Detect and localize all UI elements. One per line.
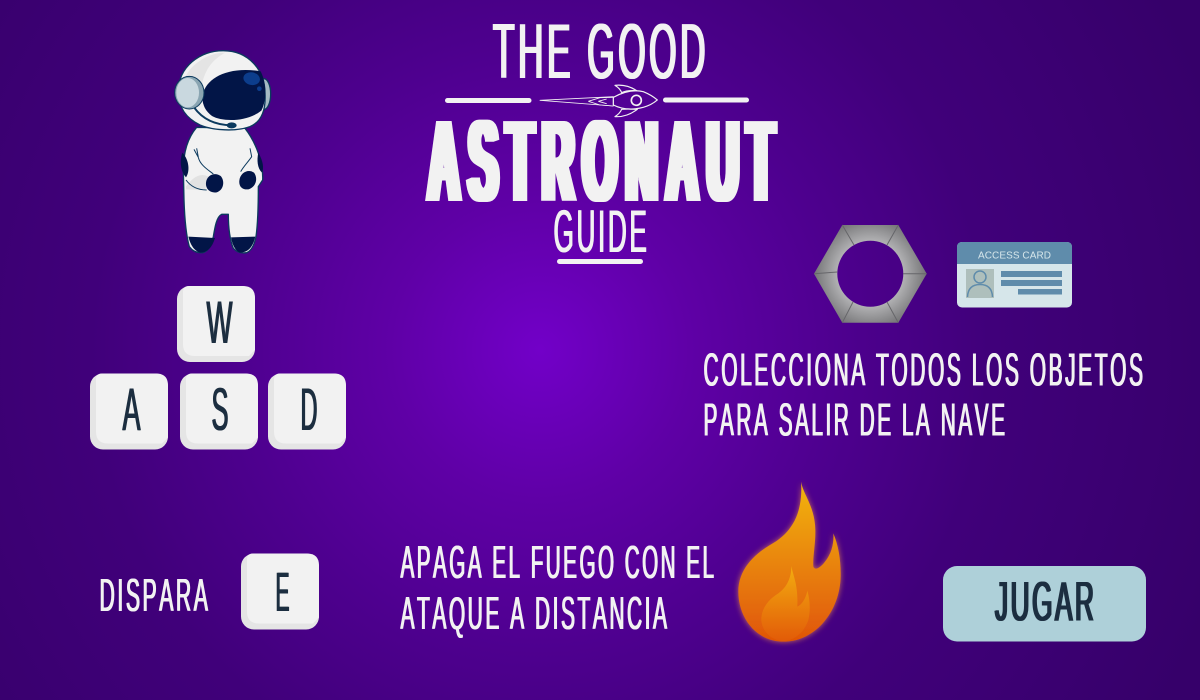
shoot instruction <box>99 554 319 630</box>
body shading <box>186 175 208 190</box>
icon: flame <box>738 482 841 642</box>
key E <box>241 554 319 630</box>
right arm line <box>241 148 252 172</box>
card label: ACCESS CARD <box>978 250 1051 262</box>
key W: W <box>206 289 232 356</box>
microphone <box>227 122 237 128</box>
title: THE GOOD <box>493 7 709 95</box>
left arm line <box>186 148 213 190</box>
key A <box>90 374 168 450</box>
astronaut back ear <box>257 79 271 109</box>
visor <box>202 70 265 120</box>
headset ear <box>175 76 204 109</box>
left title bar <box>445 98 532 103</box>
left arm patch <box>181 153 188 177</box>
key A: A <box>122 376 140 443</box>
card photo <box>966 269 994 298</box>
play button <box>943 566 1146 642</box>
visor highlight <box>242 71 261 86</box>
key S <box>180 374 258 450</box>
fire instructions <box>400 536 716 639</box>
key S: S <box>211 376 228 443</box>
left boot <box>188 237 215 253</box>
key D <box>268 374 346 450</box>
key D: D <box>300 376 317 443</box>
visor small highlight <box>257 86 262 91</box>
icon: access card <box>957 242 1072 308</box>
key W <box>177 286 255 362</box>
title <box>428 7 783 265</box>
left glove <box>206 174 223 192</box>
title: GUIDE <box>553 198 649 265</box>
collectible objects <box>814 225 1072 323</box>
right glove <box>239 171 256 189</box>
WASD keys <box>90 286 346 450</box>
collect instructions <box>703 344 1145 446</box>
headset ear inner <box>176 78 199 107</box>
flame inner <box>761 566 810 641</box>
astronaut body <box>183 127 263 253</box>
right title bar <box>663 98 749 102</box>
right arm patch <box>258 153 263 173</box>
guide underline <box>557 259 643 264</box>
rocket icon <box>540 85 657 117</box>
microphone arm <box>194 107 232 125</box>
helmet shading <box>183 53 225 107</box>
key E: E <box>275 560 289 623</box>
text: APAGA EL FUEGO CON EL <box>400 536 716 588</box>
card lines <box>1001 271 1062 294</box>
fire instructions: ATAQUE A DISTANCIA <box>400 587 669 639</box>
right boot <box>231 237 255 253</box>
icon: hex nut <box>814 225 927 323</box>
astronaut illustration <box>175 51 271 253</box>
shoot instruction: DISPARA <box>99 569 210 621</box>
helmet <box>178 51 265 130</box>
